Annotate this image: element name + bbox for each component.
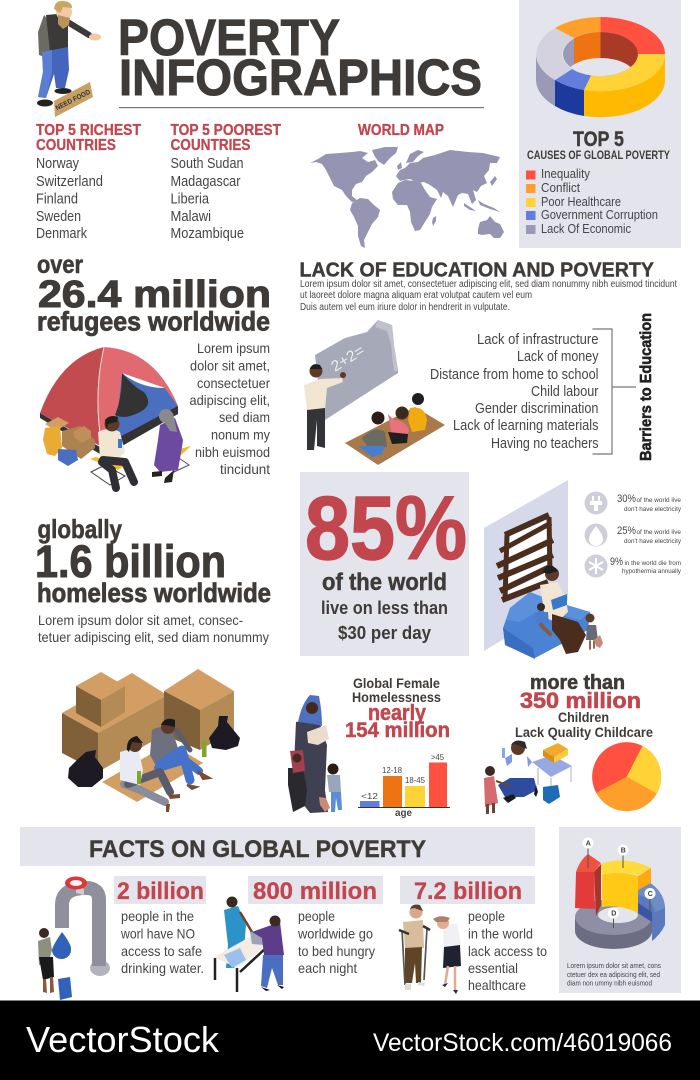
heading: world map: WORLD MAP xyxy=(358,122,444,139)
headline: refugees xyxy=(37,251,271,336)
legend: Government Corruption xyxy=(541,208,658,222)
illustration: refugees at tent xyxy=(40,347,191,488)
illustration: mother with children xyxy=(288,695,342,813)
stat: 25 percent: of the world live xyxy=(636,529,681,536)
heading: global female homelessness: nearly xyxy=(368,700,427,725)
stat: 2 billion: drinking water. xyxy=(121,960,204,976)
stat: 2 billion xyxy=(114,876,206,976)
stat: 2 billion: 2 billion xyxy=(117,878,204,905)
text block: ring chart caption: diam non ummy nibh euismod xyxy=(567,980,652,988)
icon: beggar with need food sign: NEED FOOD xyxy=(55,89,92,112)
list: barriers to education: Lack of money xyxy=(517,349,599,365)
heading: 350 million children: Lack Quality Childcare xyxy=(515,724,653,740)
list: barriers to education: Distance from home to school xyxy=(430,367,598,383)
illustration: food donation table xyxy=(214,896,284,992)
stat: 7.2 billion: 7.2 billion xyxy=(414,878,522,905)
stat: 30 percent: 30% xyxy=(617,493,636,505)
text block: refugees lorem: Lorem ipsum xyxy=(197,340,270,356)
heading: global female homelessness: Global Female xyxy=(353,675,440,691)
text block: ring chart caption: Lorem ipsum dolor sit amet, cons xyxy=(567,963,661,970)
stat: 800 million: people xyxy=(298,908,335,924)
stat: 800 million xyxy=(248,876,383,976)
stat: 800 million: 800 million xyxy=(253,878,377,905)
heading: 350 million children: 350 million xyxy=(520,688,641,713)
headline: homeless: 1.6 billion xyxy=(35,536,226,587)
stat: 9 percent: 9% xyxy=(610,556,623,568)
list: barriers to education: Having no teachers xyxy=(491,436,598,452)
headline: homeless: globally xyxy=(38,514,122,544)
stat: 25 percent: don't have electricity xyxy=(624,538,682,545)
headline: homeless xyxy=(35,514,271,608)
list: top 5 poorest countries xyxy=(170,122,281,242)
title: INFOGRAPHICS xyxy=(119,49,482,106)
panel: 85 percent: of the world xyxy=(322,569,447,596)
text block: refugees lorem xyxy=(190,340,270,477)
list: top 5 poorest countries: Madagascar xyxy=(170,174,241,190)
text block: refugees lorem: tincidunt xyxy=(220,461,270,477)
stat: 30 percent: of the world live xyxy=(636,497,681,504)
stat: 7.2 billion: in the world xyxy=(468,926,533,942)
text block: ring chart caption xyxy=(567,963,661,988)
stat: 7.2 billion: lack access to xyxy=(468,943,547,959)
heading: global female homelessness xyxy=(345,675,450,742)
text block: education lorem: ut laoreet dolore magna aliquam erat volutpat cautem vel eum xyxy=(300,290,532,301)
chart: 3d ring with labels: D xyxy=(611,910,616,918)
stat: 7.2 billion: healthcare xyxy=(468,977,526,993)
chart: 3d ring with labels: B xyxy=(621,848,626,854)
title xyxy=(118,9,484,108)
list: top 5 richest countries: Norway xyxy=(36,156,80,172)
list: barriers to education: Lack of infrastructure xyxy=(477,332,598,348)
illustration: homeless couple by cardboard boxes xyxy=(62,669,240,812)
pie chart: childcare xyxy=(592,742,662,812)
list: top 5 richest countries xyxy=(36,122,141,242)
footer: watermark bar xyxy=(0,1000,700,1080)
text block: refugees lorem: consectetuer xyxy=(197,375,270,391)
legend xyxy=(526,167,658,236)
bar chart: homelessness by age: >45 xyxy=(431,753,445,762)
list: top 5 richest countries: Denmark xyxy=(36,226,88,242)
stat: 2 billion: access to safe xyxy=(121,943,202,959)
list: top 5 poorest countries: Mozambique xyxy=(170,226,244,242)
list: top 5 poorest countries: COUNTRIES xyxy=(170,137,251,154)
legend: Inequality xyxy=(541,167,591,181)
headline: refugees: 26.4 million xyxy=(38,274,271,316)
list: barriers to education: Gender discrimination xyxy=(475,401,598,417)
heading: global female homelessness: Homelessness xyxy=(352,689,441,705)
text block: ring chart caption: ctetuer dex ea adipiscing elit, sed xyxy=(567,972,660,979)
illustration: teacher and pupils: 2+2= xyxy=(328,342,368,375)
icon: water drop xyxy=(589,526,603,546)
heading: 350 million children: Children xyxy=(558,709,609,725)
stat: 9 percent xyxy=(584,554,682,578)
stat: 25 percent: 25% xyxy=(617,525,636,537)
panel: 3d ring chart xyxy=(559,827,681,993)
panel: 85 percent: live on less than xyxy=(321,597,448,618)
banner: facts on global poverty xyxy=(20,827,535,866)
list: barriers to education: Lack of learning materials xyxy=(453,418,598,434)
stat: 800 million: each night xyxy=(298,960,357,976)
legend: Conflict xyxy=(541,181,580,195)
panel: 85 percent xyxy=(300,472,469,656)
bar chart: homelessness by age: <12 xyxy=(361,792,379,801)
world map xyxy=(310,147,504,248)
icon: plug xyxy=(590,496,602,511)
chart: 3d ring with labels xyxy=(575,838,665,949)
text block: refugees lorem: adipiscing elit, xyxy=(190,392,270,408)
list: top 5 poorest countries: TOP 5 POOREST xyxy=(170,122,281,139)
heading: top 5: TOP 5 xyxy=(573,128,624,151)
list: top 5 richest countries: TOP 5 RICHEST xyxy=(36,122,141,139)
rotated label: barriers to education: Barriers to Education xyxy=(638,313,655,461)
list: top 5 richest countries: COUNTRIES xyxy=(36,137,116,154)
list: top 5 richest countries: Finland xyxy=(36,192,78,208)
stat: 2 billion: people in the xyxy=(121,908,194,924)
stat: 30 percent: don't have electricity xyxy=(624,506,682,513)
footer: watermark bar: VectorStock xyxy=(26,1019,220,1060)
text block: refugees lorem: sed diam xyxy=(219,409,270,425)
heading: 350 million children xyxy=(515,672,653,740)
stat: 800 million: to bed hungry xyxy=(298,943,375,959)
bar chart: homelessness by age: 18-45 xyxy=(405,776,426,785)
stat: 30 percent xyxy=(584,492,682,514)
stat: 7.2 billion xyxy=(400,876,547,993)
illustration: family on sofa by boarded window xyxy=(484,480,603,659)
illustration: teacher and pupils xyxy=(304,320,445,465)
icon: water tap with person xyxy=(38,876,110,1000)
heading: lack of education: LACK OF EDUCATION AND POVERTY xyxy=(300,258,654,282)
list: top 5 richest countries: Switzerland xyxy=(36,174,103,190)
list: top 5 poorest countries: Malawi xyxy=(170,209,211,225)
heading: global female homelessness: 154 million xyxy=(345,719,450,742)
text block: refugees lorem: nonum my xyxy=(211,426,270,442)
list: barriers to education: Child labour xyxy=(531,384,599,400)
icon: snowflake xyxy=(589,558,603,574)
title: POVERTY xyxy=(118,9,340,66)
text block: education lorem xyxy=(300,279,677,313)
stat: 2 billion: worl have NO xyxy=(120,926,195,942)
stat: 800 million: worldwide go xyxy=(297,926,373,942)
stat: 9 percent: hypothermia annually xyxy=(622,568,682,575)
icon: beggar with need food sign xyxy=(37,1,101,117)
list: top 5 poorest countries: Liberia xyxy=(170,192,210,208)
legend: Lack Of Economic xyxy=(541,222,631,236)
text block: education lorem: Duis autem vel eum iriure dolor in hendrerit in vulputate. xyxy=(300,302,510,313)
list: top 5 richest countries: Sweden xyxy=(36,209,81,225)
stat: 7.2 billion: essential xyxy=(468,960,518,976)
bar chart: homelessness by age xyxy=(358,753,450,819)
text block: refugees lorem: dolor sit amet, xyxy=(190,358,270,374)
panel: top 5 causes of global poverty xyxy=(519,0,681,248)
text block: homeless lorem: Lorem ipsum dolor sit amet, consec- xyxy=(38,612,243,628)
3d donut chart xyxy=(536,17,665,117)
legend: Poor Healthcare xyxy=(541,195,621,209)
text block: homeless lorem: tetuer adipiscing elit, sed diam nonummy xyxy=(38,629,269,645)
text block: refugees lorem: nibh euismod xyxy=(195,444,270,460)
banner: facts on global poverty: FACTS ON GLOBAL POVERTY xyxy=(89,836,426,863)
list: top 5 poorest countries: South Sudan xyxy=(170,156,244,172)
bar chart: homelessness by age: 12-18 xyxy=(382,766,403,775)
chart: 3d ring with labels: C xyxy=(648,891,653,898)
headline: homeless: homeless worldwide xyxy=(37,578,271,608)
stat: 9 percent: in the world die from xyxy=(624,560,681,567)
stat: 7.2 billion: people xyxy=(468,908,505,924)
headline: refugees: over xyxy=(37,251,83,279)
illustration: patients on crutches xyxy=(399,904,461,994)
chart: 3d ring with labels: A xyxy=(586,840,591,848)
panel: 85 percent: $30 per day xyxy=(338,622,432,643)
bar chart: homelessness by age: age xyxy=(395,808,412,819)
text block: homeless lorem xyxy=(38,612,269,645)
footer: watermark bar: VectorStock.com/46019066 xyxy=(373,1029,672,1057)
panel: 85 percent: 85% xyxy=(305,479,467,579)
headline: refugees: refugees worldwide xyxy=(37,306,270,336)
stat: 25 percent xyxy=(584,524,682,546)
list: barriers to education xyxy=(430,332,599,452)
bracket: barriers xyxy=(592,329,636,454)
heading: 350 million children: more than xyxy=(530,672,625,694)
illustration: nurse with child xyxy=(484,741,572,814)
